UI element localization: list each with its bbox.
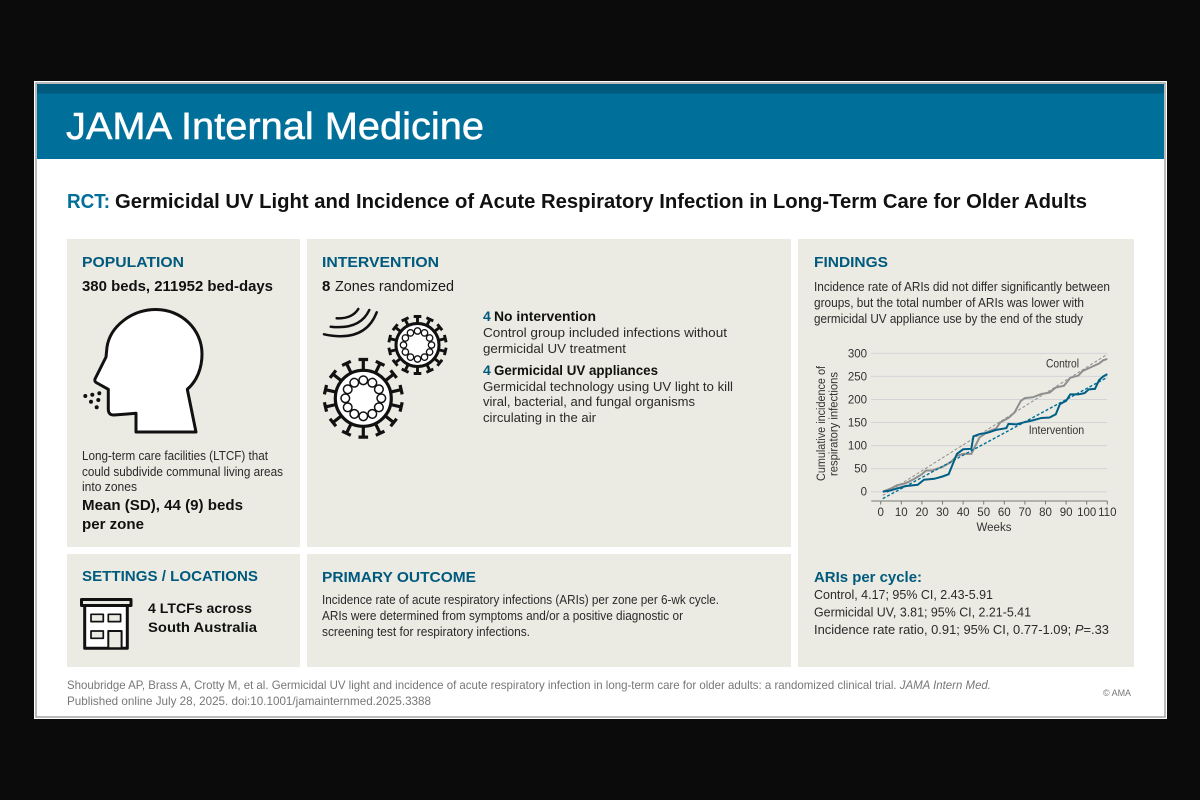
title: Germicidal UV Light and Incidence of Acute Respiratory Infection in Long-Term Care for Older Adults <box>115 191 1087 213</box>
settings text <box>148 600 257 635</box>
panel: intervention <box>307 239 791 547</box>
arm: germicidal UV appliances: Germicidal UV appliances <box>494 362 658 378</box>
x-axis labels: 30 <box>936 507 949 519</box>
arm: germicidal UV appliances <box>483 362 733 425</box>
population description <box>82 449 283 494</box>
arm: germicidal UV appliances: circulating in the air <box>483 411 596 425</box>
arm: no intervention <box>483 308 728 356</box>
panel: settings and locations <box>67 554 300 667</box>
panel: population <box>67 239 300 547</box>
settings text: 4 LTCFs across <box>148 600 252 616</box>
intervention heading: INTERVENTION <box>322 254 439 271</box>
y-axis labels: 150 <box>848 418 867 430</box>
population count: 380 beds, 211952 bed-days <box>82 278 273 295</box>
icon: head breathing out particles <box>83 310 202 432</box>
x-axis labels <box>877 507 1116 519</box>
x-axis labels: 70 <box>1019 507 1031 519</box>
findings heading: FINDINGS <box>814 254 888 271</box>
x-axis labels: 0 <box>877 507 884 519</box>
beds per zone <box>82 497 243 533</box>
citation: Shoubridge AP, Brass A, Crotty M, et al. Germicidal UV light and incidence of acute respiratory infection in long-term care for older adults: a randomized clinical trial. JAMA Intern Med. <box>67 678 991 692</box>
y-axis labels: 300 <box>848 348 867 360</box>
primary outcome text: screening test for respiratory infections. <box>322 625 530 639</box>
journal name: JAMA Internal Medicine <box>66 106 484 148</box>
ARIs per cycle results: Germicidal UV, 3.81; 95% CI, 2.21-5.41 <box>814 606 1031 620</box>
y-axis labels: 200 <box>848 394 867 406</box>
arm: germicidal UV appliances: viral, bacterial, and fungal organisms <box>483 395 695 409</box>
x-axis labels: 50 <box>977 507 990 519</box>
intervention series <box>883 374 1107 499</box>
x-axis title: Weeks <box>977 522 1012 534</box>
primary outcome text: ARIs were determined from symptoms and/or a positive diagnostic or <box>322 609 683 623</box>
arm: no intervention: germicidal UV treatment <box>483 342 627 356</box>
findings summary: germicidal UV appliance use by the end of the study <box>814 312 1084 326</box>
settings heading: SETTINGS / LOCATIONS <box>82 568 258 585</box>
y-axis title: respiratory infections <box>828 372 840 476</box>
icon: UV waves <box>324 309 377 336</box>
findings summary: groups, but the total number of ARIs was lower with <box>814 296 1084 310</box>
line chart: cumulative incidence <box>816 348 1116 534</box>
panel: primary outcome <box>307 554 791 667</box>
primary outcome heading: PRIMARY OUTCOME <box>322 569 476 586</box>
zones randomized: Zones randomized <box>335 278 454 295</box>
y-axis labels <box>848 348 867 498</box>
control series <box>883 354 1107 495</box>
citation <box>67 678 991 708</box>
icon: building <box>82 600 131 648</box>
x-axis labels: 100 <box>1077 507 1096 519</box>
title: RCT: <box>67 191 110 213</box>
panel: findings <box>798 239 1134 667</box>
series label: control: Control <box>1046 358 1079 370</box>
beds per zone: per zone <box>82 516 144 533</box>
y-axis labels: 50 <box>854 464 867 476</box>
icon: small virus <box>389 316 446 374</box>
x-axis labels: 20 <box>916 507 928 519</box>
primary outcome text <box>322 593 719 639</box>
arm: germicidal UV appliances: 4 <box>483 362 491 378</box>
population description: could subdivide communal living areas <box>82 465 283 479</box>
population description: into zones <box>82 480 137 494</box>
ARIs per cycle results: Incidence rate ratio, 0.91; 95% CI, 0.77-1.09; P=.33 <box>814 623 1109 637</box>
card frame <box>34 81 1167 719</box>
primary outcome text: Incidence rate of acute respiratory infections (ARIs) per zone per 6-wk cycle. <box>322 593 719 607</box>
y-axis title <box>816 365 840 481</box>
x-axis labels: 10 <box>895 507 908 519</box>
findings summary <box>814 280 1110 326</box>
zones randomized: 8 <box>322 278 330 295</box>
y-axis labels: 0 <box>861 486 867 498</box>
x-axis labels: 40 <box>957 507 969 519</box>
ARIs per cycle results <box>814 588 1109 637</box>
y-axis title: Cumulative incidence of <box>816 365 828 481</box>
x-axis labels: 60 <box>998 507 1011 519</box>
x-axis labels: 80 <box>1039 507 1052 519</box>
beds per zone: Mean (SD), 44 (9) beds <box>82 497 243 514</box>
ARIs per cycle results: Control, 4.17; 95% CI, 2.43-5.91 <box>814 588 993 602</box>
ARIs per cycle heading: ARIs per cycle: <box>814 569 922 586</box>
copyright: © AMA <box>1103 688 1132 699</box>
arm: no intervention: 4 <box>483 308 491 324</box>
settings text: South Australia <box>148 619 257 635</box>
findings summary: Incidence rate of ARIs did not differ significantly between <box>814 280 1110 294</box>
arm: no intervention: No intervention <box>494 308 596 324</box>
arm: germicidal UV appliances: Germicidal technology using UV light to kill <box>483 380 733 394</box>
y-axis labels: 100 <box>848 440 867 452</box>
arm: no intervention: Control group included infections without <box>483 326 728 340</box>
y-axis labels: 250 <box>848 372 867 384</box>
icon: large virus <box>324 360 402 437</box>
population heading: POPULATION <box>82 254 184 271</box>
population description: Long-term care facilities (LTCF) that <box>82 449 268 463</box>
header banner <box>37 84 1164 159</box>
x-axis labels: 110 <box>1098 507 1116 519</box>
series label: intervention: Intervention <box>1029 425 1084 437</box>
x-axis labels: 90 <box>1060 507 1072 519</box>
citation: Published online July 28, 2025. doi:10.1001/jamainternmed.2025.3388 <box>67 694 431 708</box>
